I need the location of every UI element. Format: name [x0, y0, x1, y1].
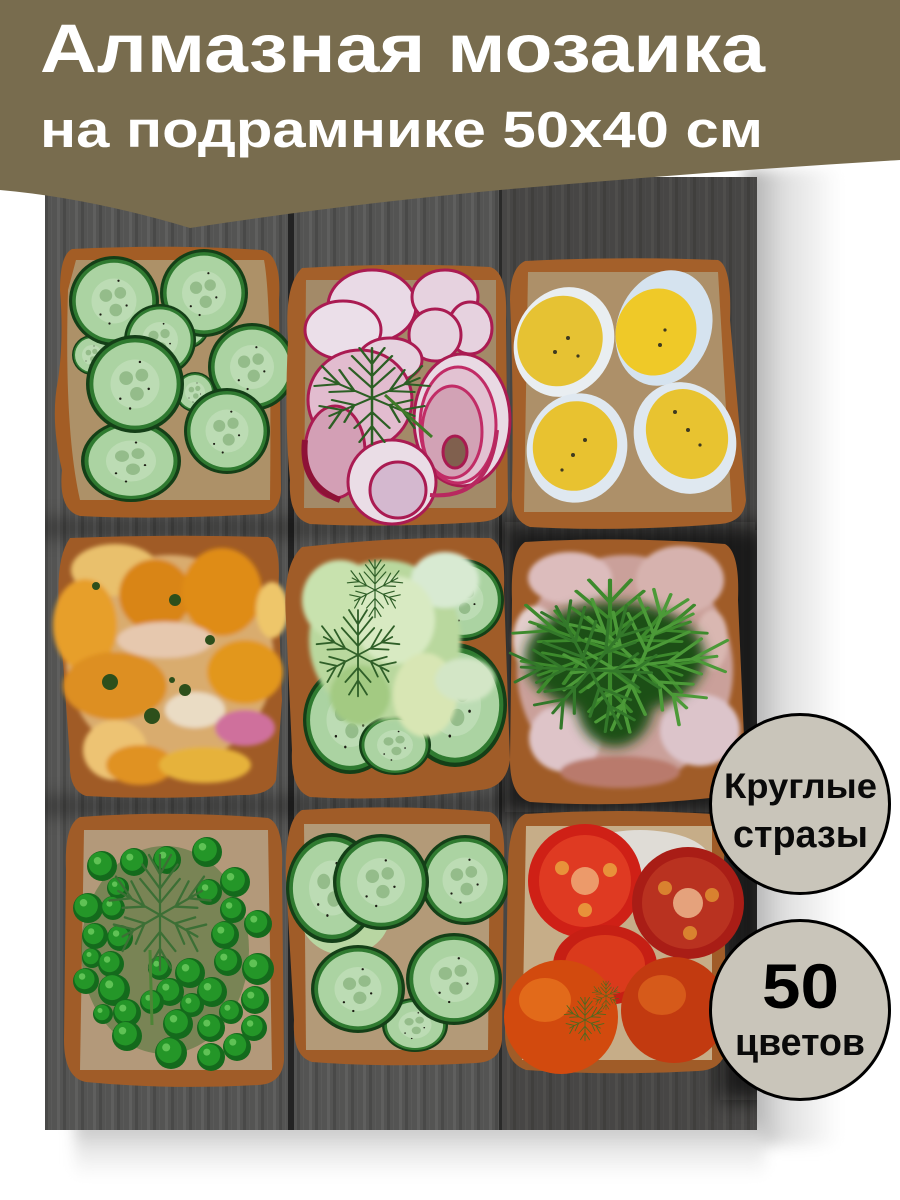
canvas picture	[35, 177, 767, 1130]
toast: tomatoes	[504, 811, 744, 1074]
badge: 50 colours: цветов	[735, 1022, 865, 1064]
tomato: whole left	[504, 960, 618, 1074]
title text: Алмазная мозаика	[40, 10, 766, 87]
wood planks	[35, 177, 767, 1130]
toast: radish	[286, 265, 510, 526]
badge: round rhinestones: Круглые	[724, 767, 877, 806]
badge: round rhinestones	[710, 714, 890, 894]
toast: egg salad with orange	[53, 536, 288, 798]
tomato: whole right	[621, 957, 727, 1063]
toast: ham and dill	[489, 539, 749, 804]
toast: cucumber slices	[55, 247, 296, 518]
toast: cucumbers on cream	[286, 807, 510, 1065]
badge: 50 colours: 50	[762, 952, 839, 1022]
egg halves	[496, 256, 754, 514]
tomato: red slice left	[528, 824, 642, 938]
toast: eggs	[496, 256, 754, 529]
canvas shadow	[75, 170, 840, 1178]
tomato: centre slice	[553, 925, 657, 1005]
badge: round rhinestones: стразы	[733, 814, 868, 856]
toast: green peas	[64, 814, 284, 1087]
tomato: dark slice right	[632, 847, 744, 959]
badge: 50 colours	[710, 920, 890, 1100]
subtitle text: на подрамнике 50х40 см	[40, 101, 763, 158]
title banner	[0, 0, 900, 228]
toast: green avocado spread	[285, 538, 510, 798]
